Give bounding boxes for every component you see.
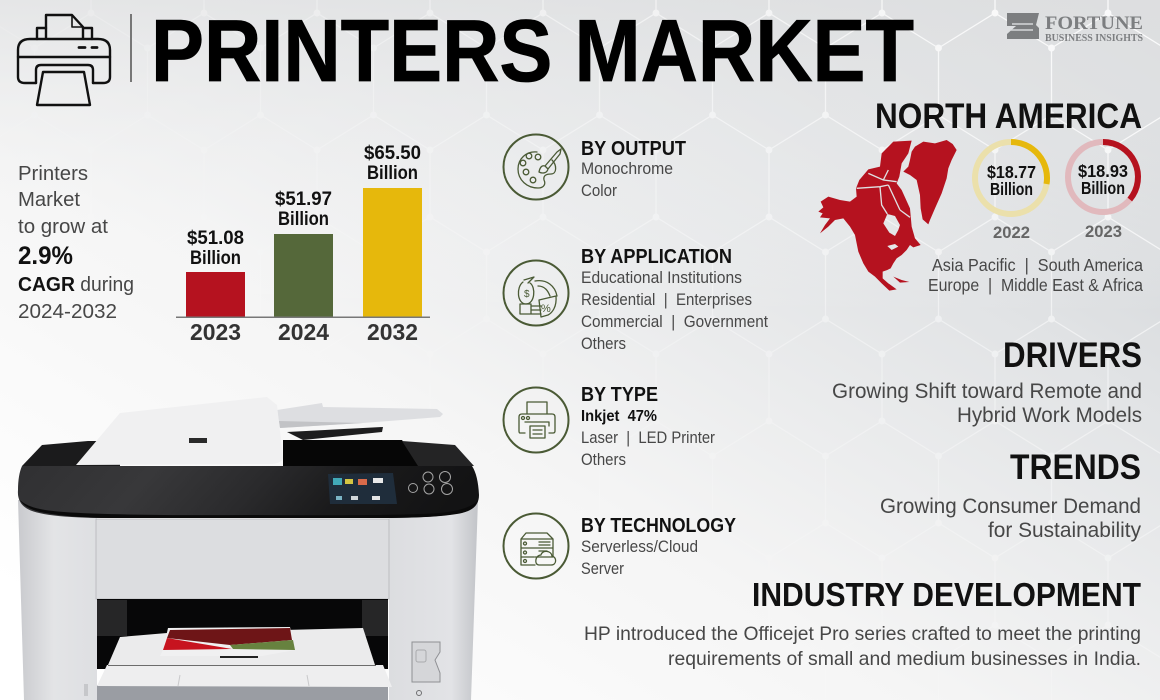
title: PRINTERS MARKET xyxy=(151,1,914,100)
donut: 2022: 2022 xyxy=(993,223,1030,242)
segment: by technology: Serverless/Cloud xyxy=(581,538,698,556)
bar chart: $51.08 xyxy=(187,228,244,249)
bar chart: 2023 xyxy=(190,319,241,345)
icon: money and percent: $ xyxy=(524,289,530,300)
bar chart: 2024 xyxy=(278,319,329,345)
segment: by application: BY APPLICATION xyxy=(581,246,732,268)
front panel xyxy=(96,519,389,599)
icon: money and percent: % xyxy=(541,303,551,315)
segment: by output: BY OUTPUT xyxy=(581,138,686,160)
bar chart: $51.97 xyxy=(275,189,332,210)
text block: other regions xyxy=(928,255,1143,295)
text block: CAGR statement: Market xyxy=(18,189,80,211)
donut: 2022: $18.77 xyxy=(987,162,1036,182)
printer photo xyxy=(18,397,479,700)
map: North America xyxy=(818,140,957,291)
panel: trends xyxy=(880,448,1141,542)
icon: server cloud xyxy=(504,514,568,578)
text block: CAGR statement: CAGR during xyxy=(18,274,134,296)
segment: by type: BY TYPE xyxy=(581,384,658,406)
donut: 2023: 2023 xyxy=(1085,222,1122,241)
text block: other regions: Europe | Middle East & Africa xyxy=(928,275,1143,295)
icon: palette xyxy=(504,134,568,200)
text block: CAGR statement: 2.9% xyxy=(18,242,73,270)
donut: 2023 xyxy=(1068,142,1138,241)
segment: by application: Others xyxy=(581,335,626,353)
logo: Fortune Business Insights: BUSINESS INSIGHTS xyxy=(1045,32,1143,44)
text block: other regions: Asia Pacific | South America xyxy=(932,255,1143,275)
icon: money and percent xyxy=(504,260,568,326)
header divider xyxy=(130,14,132,82)
bar chart: 2032 xyxy=(367,319,418,345)
segment: by type: Others xyxy=(581,451,626,469)
segment: by application: Commercial | Government xyxy=(581,313,768,331)
text block: CAGR statement: Printers xyxy=(18,163,88,185)
panel: industry development xyxy=(584,576,1141,670)
segment: by application: Educational Institutions xyxy=(581,269,742,287)
segment: by output: Color xyxy=(581,182,617,200)
panel: drivers: DRIVERS xyxy=(1003,336,1142,375)
donut: 2022 xyxy=(975,142,1047,242)
donut: 2022: Billion xyxy=(990,179,1033,199)
segment: by output: Monochrome xyxy=(581,160,673,178)
panel: drivers: Growing Shift toward Remote and xyxy=(832,380,1142,403)
panel: industry development: HP introduced the Officejet Pro series crafted to meet the printing xyxy=(584,623,1141,645)
panel: trends: for Sustainability xyxy=(988,519,1141,542)
text block: CAGR statement: to grow at xyxy=(18,216,108,238)
icon: printer outline xyxy=(18,15,110,105)
segment: by output xyxy=(504,134,686,200)
panel: trends: Growing Consumer Demand xyxy=(880,495,1141,518)
logo: Fortune Business Insights xyxy=(1007,13,1143,44)
panel: trends: TRENDS xyxy=(1010,448,1141,487)
bar chart: Billion xyxy=(278,209,329,230)
bar chart xyxy=(176,143,430,345)
segment: by technology xyxy=(504,514,737,578)
segment: by technology: BY TECHNOLOGY xyxy=(581,515,737,537)
text block: CAGR statement: 2024-2032 xyxy=(18,301,117,323)
control screen xyxy=(328,473,397,504)
bar chart: Billion xyxy=(190,248,241,269)
segment: by application: Residential | Enterprises xyxy=(581,291,752,309)
panel: drivers: Hybrid Work Models xyxy=(957,404,1142,427)
logo: Fortune Business Insights: FORTUNE xyxy=(1045,13,1143,34)
segment: by application xyxy=(504,246,768,353)
icon: printer xyxy=(504,388,568,452)
output tray xyxy=(97,665,392,687)
donut: 2023: $18.93 xyxy=(1078,161,1128,181)
panel: drivers xyxy=(832,336,1142,427)
bar chart: Billion xyxy=(367,163,418,184)
segment: by technology: Server xyxy=(581,560,624,578)
segment: by type xyxy=(504,384,715,469)
donut: 2023: Billion xyxy=(1081,178,1125,198)
segment: by type: Laser | LED Printer xyxy=(581,429,715,447)
text block: CAGR statement xyxy=(18,163,134,323)
panel: industry development: requirements of small and medium businesses in India. xyxy=(668,648,1141,670)
bar chart: $65.50 xyxy=(364,143,421,164)
segment: by type: Inkjet 47% xyxy=(581,408,657,425)
